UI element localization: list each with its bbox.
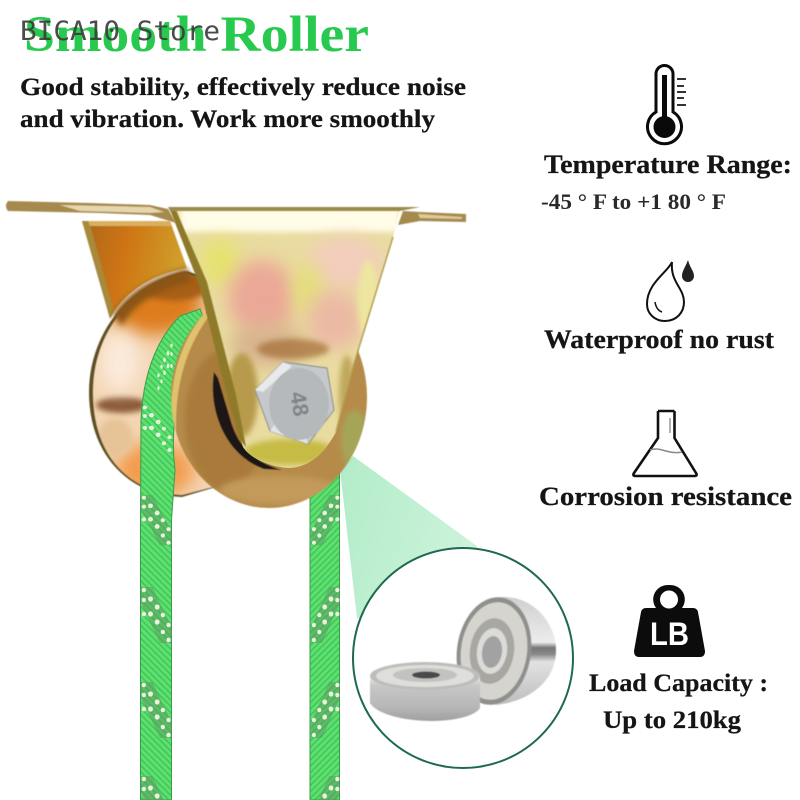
wheel rear flange bbox=[88, 270, 214, 498]
intro text bbox=[20, 74, 466, 133]
load capacity text: Up to 210kg bbox=[603, 707, 742, 734]
rear bracket arm bbox=[82, 221, 192, 326]
bolt head marking: 48 bbox=[285, 390, 314, 418]
title: Smooth Roller bbox=[24, 7, 369, 63]
upright bearing bbox=[456, 596, 557, 706]
intro text: Good stability, effectively reduce noise bbox=[20, 74, 466, 101]
pulley bbox=[6, 201, 466, 800]
temperature text bbox=[541, 150, 792, 214]
wheel front flange bbox=[170, 312, 368, 509]
temperature text: -45 ° F to +1 80 ° F bbox=[541, 189, 726, 214]
store watermark: BICA10 Store bbox=[20, 16, 220, 47]
right rope bbox=[310, 470, 340, 800]
intro text: and vibration. Work more smoothly bbox=[20, 106, 436, 133]
left rope bbox=[140, 309, 208, 800]
icon: water drop bbox=[647, 260, 694, 321]
mounting plate bbox=[6, 201, 466, 225]
icon: LB weight: LB bbox=[650, 616, 689, 652]
load capacity text: Load Capacity : bbox=[589, 670, 768, 697]
bearing detail circle bbox=[353, 548, 573, 768]
icon: LB weight bbox=[634, 585, 705, 657]
front bracket arm bbox=[170, 206, 400, 468]
icon: flask bbox=[633, 411, 697, 476]
waterproof text: Waterproof no rust bbox=[544, 325, 774, 354]
corrosion text: Corrosion resistance bbox=[539, 482, 792, 511]
zoom beam bbox=[340, 456, 477, 658]
load capacity text bbox=[589, 670, 768, 734]
icon: thermometer bbox=[647, 66, 686, 144]
lying bearing bbox=[370, 662, 480, 721]
dark bearing crescent bbox=[213, 372, 282, 470]
temperature text: Temperature Range: bbox=[544, 150, 792, 179]
bolt bbox=[255, 362, 334, 444]
